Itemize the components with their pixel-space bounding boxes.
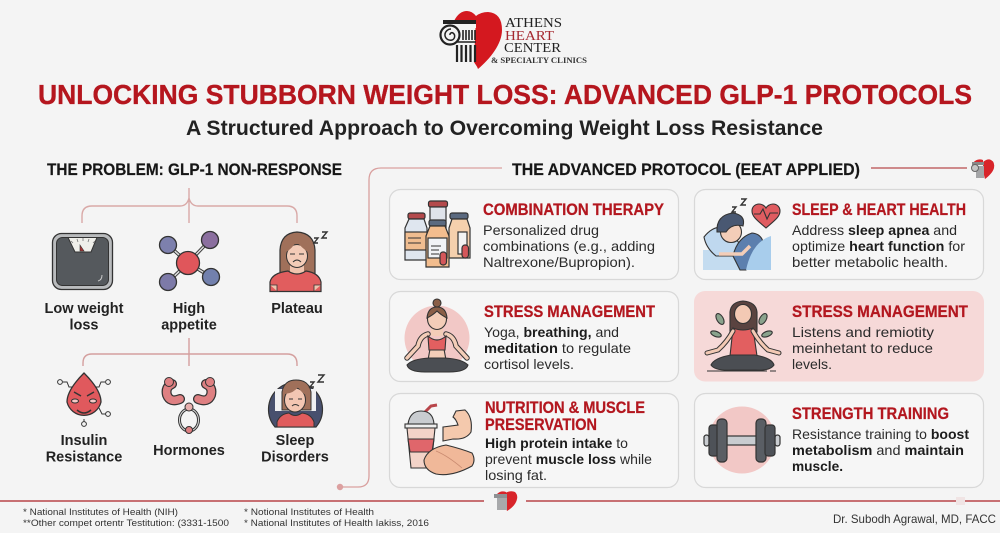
panel: nutrition and muscle — [390, 394, 678, 488]
label: sleep disorders: Sleep — [276, 433, 314, 449]
footer divider with logo — [0, 491, 1000, 511]
credit: Dr. Subodh Agrawal, MD, FACC — [833, 512, 996, 526]
panel: stress management highlighted: meinhetant to reduce — [792, 340, 933, 356]
panel: sleep and heart health — [694, 190, 984, 280]
panel: combination therapy — [390, 190, 678, 280]
logo: Athens Heart Center: CENTER — [504, 40, 561, 55]
label: sleep disorders: Disorders — [261, 450, 329, 466]
panel: strength training: Resistance training to boost — [792, 426, 969, 442]
text: nutrition and muscle: NUTRITION & MUSCLE — [485, 399, 645, 417]
icon: weighing scale — [52, 234, 112, 290]
panel: sleep and heart health: better metabolic health. — [792, 254, 948, 270]
icon: yoga woman — [404, 299, 470, 372]
panel: combination therapy: Personalized drug — [483, 222, 599, 238]
text: strength training: STRENGTH TRAINING — [792, 405, 949, 423]
heading: advanced protocol: THE ADVANCED PROTOCOL (EEAT APPLIED) — [512, 160, 860, 179]
heading: the problem: THE PROBLEM: GLP-1 NON-RESPONSE — [47, 160, 342, 179]
footnotes: left: * National Institutes of Health (NIH) — [23, 507, 178, 518]
connector: problem to protocol — [337, 168, 502, 490]
footnotes: middle: * Notional Institutes of Health — [244, 507, 374, 518]
panel: stress management yoga: Yoga, breathing, and — [484, 324, 619, 340]
label: high appetite: appetite — [161, 318, 217, 334]
panel: sleep and heart health: Address sleep apnea and — [792, 222, 957, 238]
text: stress management highlighted: STRESS MANAGEMENT — [792, 303, 968, 321]
panel: strength training: metabolism and maintain — [792, 442, 964, 458]
panel: strength training: muscle. — [792, 458, 843, 474]
icon: meditating woman with leaves — [707, 301, 779, 371]
label: insulin resistance: Resistance — [46, 450, 122, 466]
title: UNLOCKING STUBBORN WEIGHT LOSS: ADVANCED GLP-1 PROTOCOLS — [38, 79, 972, 110]
icon: insulin drop — [58, 373, 110, 426]
panel: nutrition and muscle: losing fat. — [485, 467, 547, 483]
label: low weight loss: loss — [69, 318, 99, 334]
text: stress management yoga: STRESS MANAGEMENT — [484, 303, 655, 321]
icon: hormones — [164, 378, 214, 434]
panel: strength training — [694, 394, 984, 488]
panel: combination therapy: combinations (e.g., adding — [483, 238, 655, 254]
panel: stress management yoga: cortisol levels. — [484, 356, 574, 372]
text: **Other compet ortentr Testitution: (3331-1500 — [23, 518, 229, 529]
logo: Athens Heart Center: ATHENS — [505, 15, 562, 30]
icon: shake, muscle and chicken — [405, 405, 474, 475]
bracket connector: top — [82, 188, 297, 223]
icon: tired woman — [270, 232, 327, 292]
logo: Athens Heart Center: HEART — [505, 28, 555, 43]
label: high appetite: High — [173, 301, 205, 317]
label: hormones: Hormones — [153, 443, 225, 459]
text: combination therapy: COMBINATION THERAPY — [483, 201, 664, 219]
panel: combination therapy: Naltrexone/Bupropion). — [483, 254, 635, 270]
text: * National Institutes of Health Iakiss, 2016 — [244, 518, 429, 529]
logo: Athens Heart Center — [440, 11, 587, 69]
icon: molecule — [160, 232, 220, 290]
label: plateau: Plateau — [271, 301, 323, 317]
panel: stress management yoga — [390, 292, 678, 382]
header rule and mini logo — [871, 159, 994, 179]
logo: Athens Heart Center: & SPECIALTY CLINICS — [491, 55, 587, 65]
label: insulin resistance: Insulin — [61, 433, 107, 449]
panel: stress management highlighted: levels. — [792, 356, 832, 372]
text: sleep and heart health: SLEEP & HEART HEALTH — [792, 201, 966, 219]
icon: sleep disorders — [268, 375, 324, 427]
panel: nutrition and muscle: PRESERVATION — [485, 416, 597, 434]
panel: stress management yoga: meditation to regulate — [484, 340, 631, 356]
panel: stress management highlighted: Listens and remiotity — [792, 324, 934, 340]
panel: nutrition and muscle: prevent muscle loss while — [485, 451, 652, 467]
subtitle: A Structured Approach to Overcoming Weight Loss Resistance — [186, 117, 823, 140]
panel: stress management highlighted — [694, 291, 984, 382]
icon: sleeping man with heart — [703, 199, 780, 270]
icon: dumbbell — [704, 406, 780, 474]
panel: nutrition and muscle: High protein intake to — [485, 435, 628, 451]
panel: sleep and heart health: optimize heart function for — [792, 238, 965, 254]
icon: medicine bottles — [405, 201, 470, 267]
bracket connector: bottom — [83, 338, 297, 366]
label: low weight loss: Low weight — [45, 301, 123, 317]
